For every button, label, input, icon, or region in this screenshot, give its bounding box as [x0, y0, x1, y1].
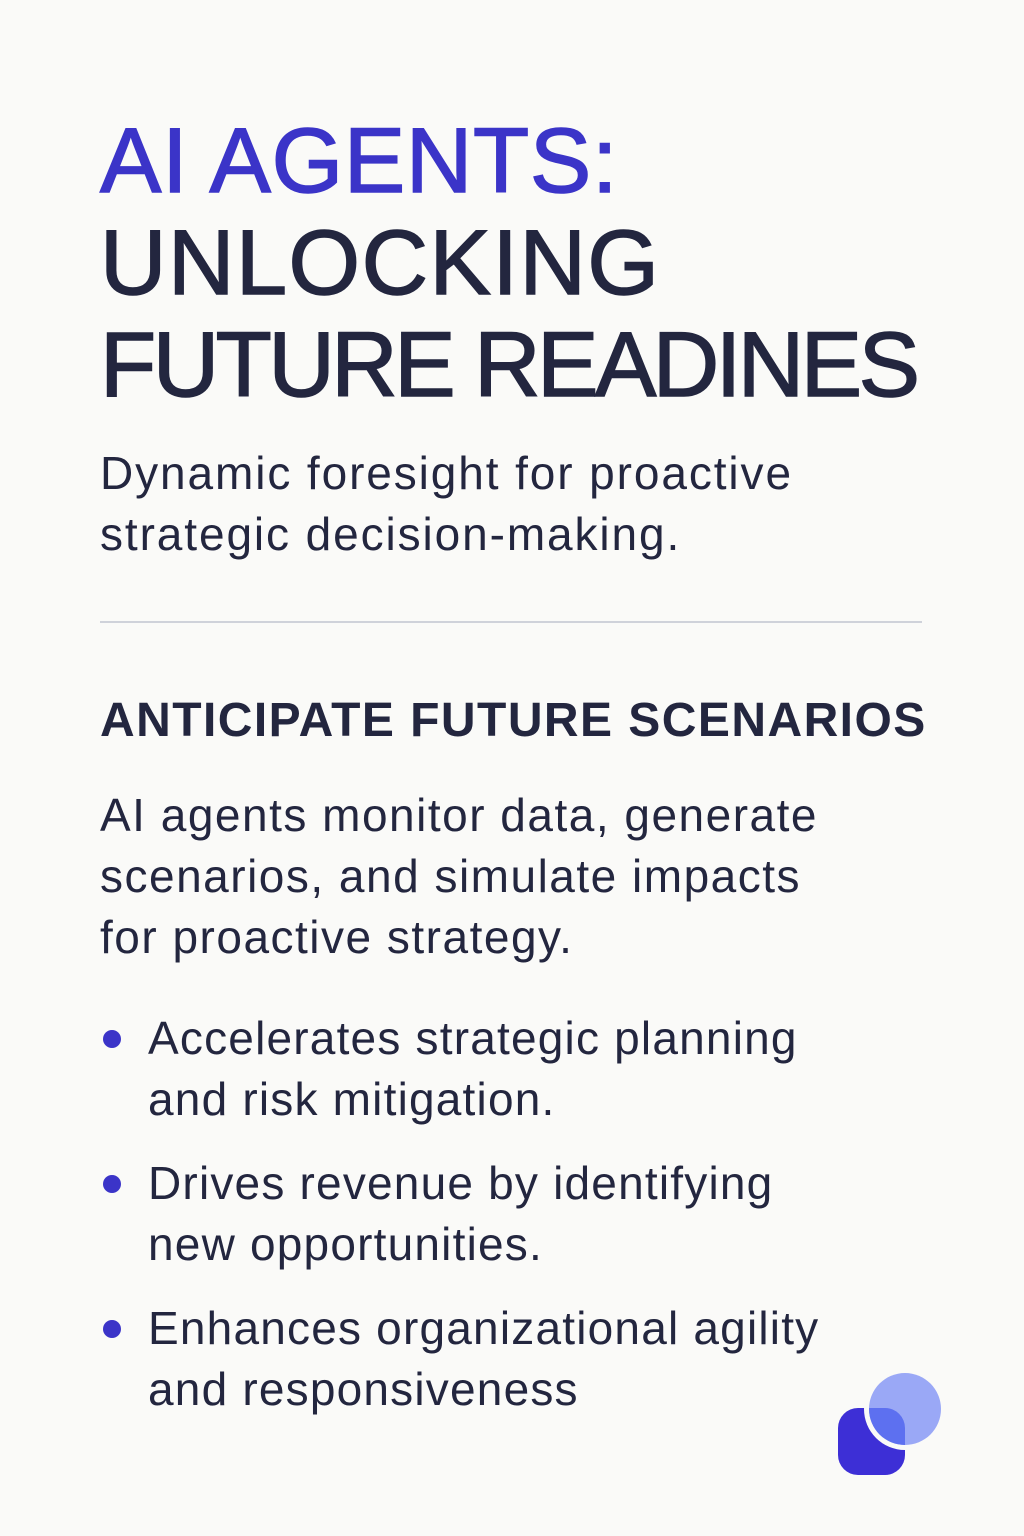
- title: UNLOCKING: [100, 212, 660, 314]
- bullet 1: Accelerates strategic planning: [148, 1012, 798, 1064]
- body text: [100, 789, 818, 963]
- title: FUTURE READINES: [100, 314, 916, 416]
- subtitle: strategic decision-making.: [100, 508, 681, 560]
- body text: AI agents monitor data, generate: [100, 789, 818, 841]
- bullet 3: and responsiveness: [148, 1363, 579, 1415]
- bullet 1: and risk mitigation.: [148, 1073, 556, 1125]
- bullet 3: [103, 1302, 819, 1415]
- bullet 2: [103, 1157, 773, 1270]
- icon: logo: [838, 1373, 941, 1475]
- section heading: ANTICIPATE FUTURE SCENARIOS: [100, 694, 927, 747]
- body text: for proactive strategy.: [100, 911, 573, 963]
- bullet 2: Drives revenue by identifying: [148, 1157, 773, 1209]
- bullet 2: new opportunities.: [148, 1218, 543, 1270]
- subtitle: Dynamic foresight for proactive: [100, 447, 793, 499]
- bullet 1: [103, 1012, 798, 1125]
- subtitle: [100, 447, 793, 560]
- bullet 3: Enhances organizational agility: [148, 1302, 819, 1354]
- body text: scenarios, and simulate impacts: [100, 850, 801, 902]
- title: AI AGENTS:: [100, 110, 618, 212]
- title: [99, 110, 916, 416]
